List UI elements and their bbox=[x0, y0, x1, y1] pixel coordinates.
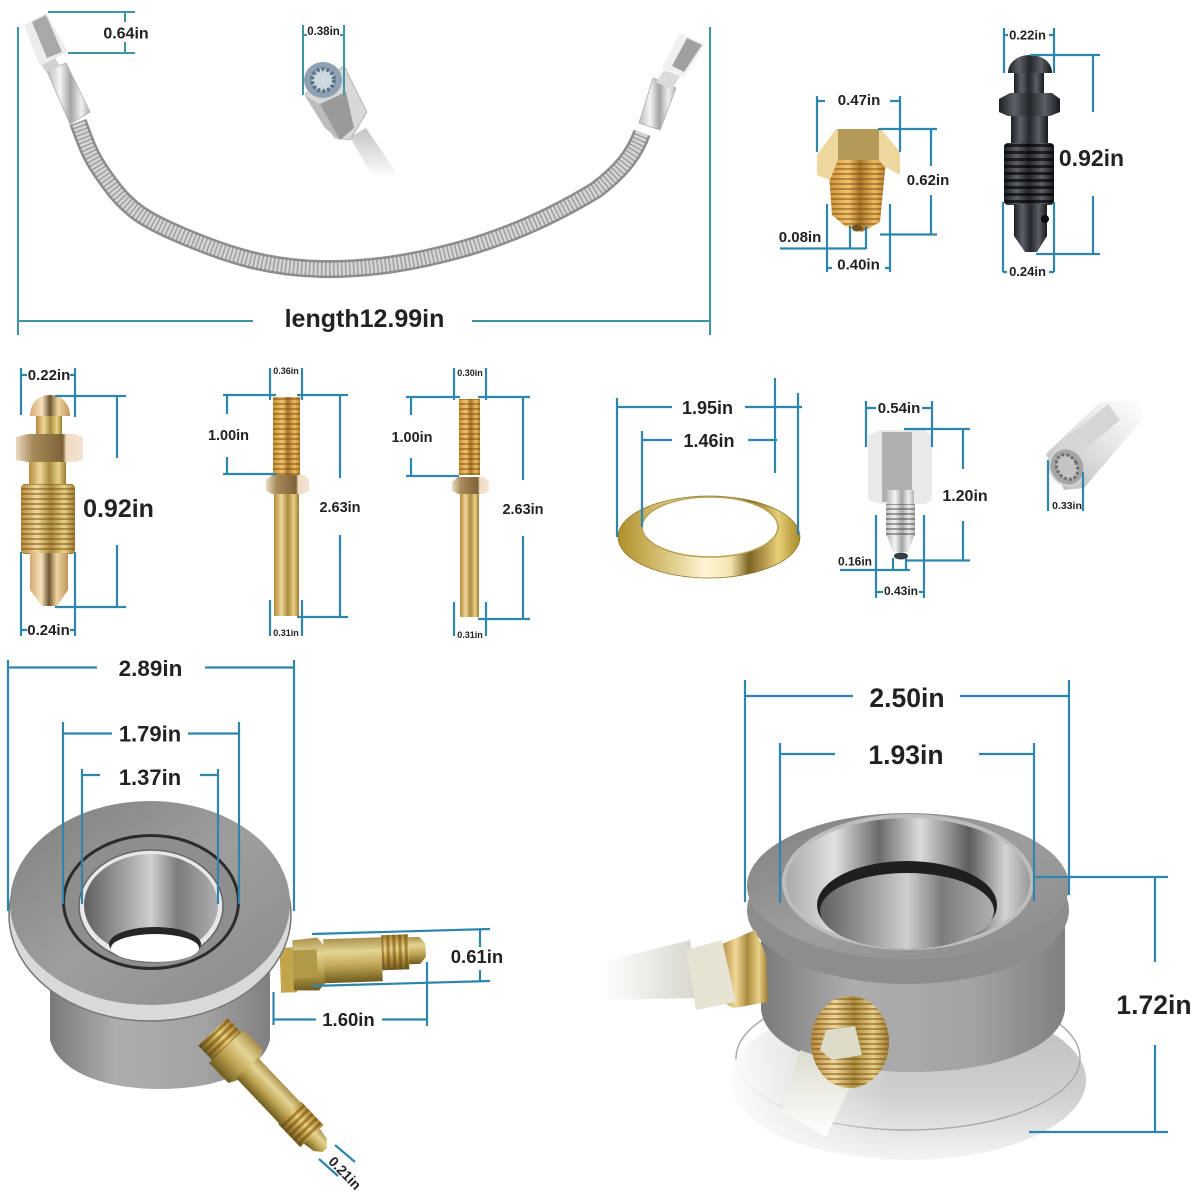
bearing bore bbox=[84, 854, 218, 956]
icon: small hex coupler bbox=[1043, 400, 1142, 492]
right brass fitting bbox=[279, 934, 427, 993]
dimension: plug 0.08in bbox=[779, 226, 866, 249]
dimension: stud one 0.36in: 0.36in bbox=[273, 366, 299, 376]
dimension: washer 1.95in: 1.95in bbox=[682, 398, 733, 418]
bearing lower cylinder bbox=[50, 960, 270, 1089]
dimension: fitting length 0.64in bbox=[48, 12, 149, 53]
icon: hose nut close-up bbox=[304, 62, 400, 178]
dimension: funnel 1.93in: 1.93in bbox=[868, 740, 944, 770]
left hose fitting bbox=[24, 13, 90, 124]
dimension: brass screw 0.24in bbox=[21, 552, 75, 639]
dimension: adapter 0.54in bbox=[866, 400, 932, 447]
dimension: adapter 0.16in: 0.16in bbox=[838, 554, 872, 568]
left brass thread and pale hex bbox=[686, 930, 768, 1010]
bearing race bbox=[62, 834, 240, 970]
dimension: brass screw 0.24in: 0.24in bbox=[27, 622, 70, 639]
dimension: stud one 0.31in: 0.31in bbox=[273, 628, 299, 638]
dimension: stud one 0.31in bbox=[270, 600, 302, 638]
long threaded stud two bbox=[452, 399, 489, 617]
slave cylinder with faded fittings bbox=[602, 813, 1086, 1160]
dimension: adapter 0.54in: 0.54in bbox=[878, 400, 920, 417]
dimension: plug 0.62in bbox=[878, 129, 949, 234]
faded base bbox=[730, 1000, 1086, 1160]
dimension: black screw 0.24in: 0.24in bbox=[1009, 264, 1046, 279]
dimension: plug 0.62in: 0.62in bbox=[907, 172, 949, 189]
dimension: fitting 0.61in bbox=[312, 929, 503, 986]
right hose fitting bbox=[639, 33, 705, 130]
dimension: black screw 0.92in: 0.92in bbox=[1059, 145, 1124, 171]
dimension: brass screw 0.92in bbox=[55, 396, 154, 607]
dimension: washer 1.95in bbox=[617, 378, 802, 537]
brass hex plug bbox=[817, 129, 900, 232]
silver adapter fitting bbox=[868, 430, 932, 560]
dimension: stud two 0.30in bbox=[454, 368, 486, 400]
release bearing with brass fittings bbox=[9, 801, 427, 1166]
dimension: hose length 12.99in: length12.99in bbox=[285, 305, 444, 333]
dimension: race 1.79in bbox=[63, 722, 239, 904]
dimension: plug 0.47in: 0.47in bbox=[838, 92, 880, 109]
funnel bbox=[782, 814, 1034, 950]
dimension: height 1.72in: 1.72in bbox=[1116, 990, 1192, 1020]
dimension: brass screw 0.22in bbox=[21, 367, 75, 417]
dimension: hose length 12.99in bbox=[18, 27, 710, 335]
dimension: nut width 0.38in: 0.38in bbox=[307, 26, 340, 38]
dimension: adapter 1.20in: 1.20in bbox=[942, 488, 988, 505]
dimension: adapter 0.43in: 0.43in bbox=[884, 584, 918, 598]
bore bbox=[817, 861, 997, 949]
long threaded stud one bbox=[266, 397, 309, 616]
dimension: flange 2.50in bbox=[745, 680, 1069, 902]
dimension: flange 2.50in: 2.50in bbox=[869, 683, 945, 713]
hose braid bbox=[78, 122, 642, 269]
dimension: adapter 0.43in bbox=[876, 515, 924, 598]
dimension: stud two 0.31in: 0.31in bbox=[457, 630, 483, 640]
plug hex head bbox=[817, 129, 900, 180]
brass conical washer bbox=[618, 496, 800, 578]
dimension: coupler 0.33in bbox=[1048, 460, 1083, 512]
dimension: plug 0.40in bbox=[827, 204, 890, 274]
black bleeder screw bbox=[999, 55, 1060, 252]
braided hose with fittings bbox=[24, 13, 705, 269]
dimension: stud two 2.63in bbox=[478, 397, 544, 619]
dimension: stud one 1.00in: 1.00in bbox=[208, 428, 249, 444]
dimension: coupler 0.33in: 0.33in bbox=[1052, 500, 1082, 512]
cylinder body bbox=[761, 900, 1065, 1072]
dimension: stud two 0.30in: 0.30in bbox=[457, 368, 483, 378]
bearing flange bbox=[9, 809, 291, 1021]
dimension: stud two 1.00in: 1.00in bbox=[391, 430, 433, 446]
dimension: bore 1.37in bbox=[82, 765, 218, 904]
dimension: plug 0.08in: 0.08in bbox=[779, 229, 821, 246]
dimension: fitting 1.60in bbox=[273, 962, 427, 1030]
dimension: fitting 0.61in: 0.61in bbox=[451, 946, 503, 967]
dimension: stud two 2.63in: 2.63in bbox=[502, 502, 544, 518]
dimension: flange 2.89in bbox=[8, 656, 294, 911]
dimension: fitting length 0.64in: 0.64in bbox=[103, 26, 149, 42]
dimension: black screw 0.92in bbox=[1030, 55, 1124, 254]
dimension: nut width 0.38in bbox=[303, 25, 344, 95]
dimension: black screw 0.22in bbox=[1004, 28, 1054, 73]
faded hose left bbox=[602, 940, 700, 1000]
dimension: adapter 1.20in bbox=[904, 429, 988, 560]
brass bleeder screw bbox=[16, 395, 83, 606]
dimension: race 1.79in: 1.79in bbox=[119, 722, 181, 746]
dimension: stud two 0.31in bbox=[454, 602, 486, 640]
dimension: fitting tip 0.21in: 0.21in bbox=[325, 1153, 365, 1193]
dimension: brass screw 0.92in: 0.92in bbox=[83, 495, 154, 523]
dimension: black screw 0.24in bbox=[1003, 202, 1054, 279]
dimension: fitting 1.60in: 1.60in bbox=[322, 1009, 375, 1030]
dimension: stud one 1.00in bbox=[208, 395, 276, 474]
dimension: height 1.72in bbox=[1029, 877, 1192, 1132]
dimension: flange 2.89in: 2.89in bbox=[119, 656, 182, 681]
dimension: stud one 2.63in: 2.63in bbox=[319, 500, 361, 516]
dimension: stud one 0.36in bbox=[270, 366, 302, 400]
dimension: adapter 0.16in bbox=[838, 554, 910, 570]
dimension: brass screw 0.22in: 0.22in bbox=[28, 367, 70, 384]
lower brass fitting bbox=[195, 1015, 342, 1166]
dimension: stud one 2.63in bbox=[297, 395, 361, 617]
dimension: black screw 0.22in: 0.22in bbox=[1009, 28, 1046, 42]
plug thread bbox=[828, 160, 886, 232]
dimension: bore 1.37in: 1.37in bbox=[119, 765, 181, 790]
dimension: stud two 1.00in bbox=[391, 397, 460, 476]
dimension: funnel 1.93in bbox=[780, 740, 1034, 903]
flange rim bbox=[747, 836, 1069, 984]
dimension: washer 1.46in bbox=[642, 431, 777, 527]
dimension: washer 1.46in: 1.46in bbox=[683, 431, 735, 451]
lower brass thread and pale tube bbox=[782, 996, 889, 1137]
dimension: plug 0.40in: 0.40in bbox=[837, 256, 880, 274]
dimension: plug 0.47in bbox=[817, 92, 900, 152]
